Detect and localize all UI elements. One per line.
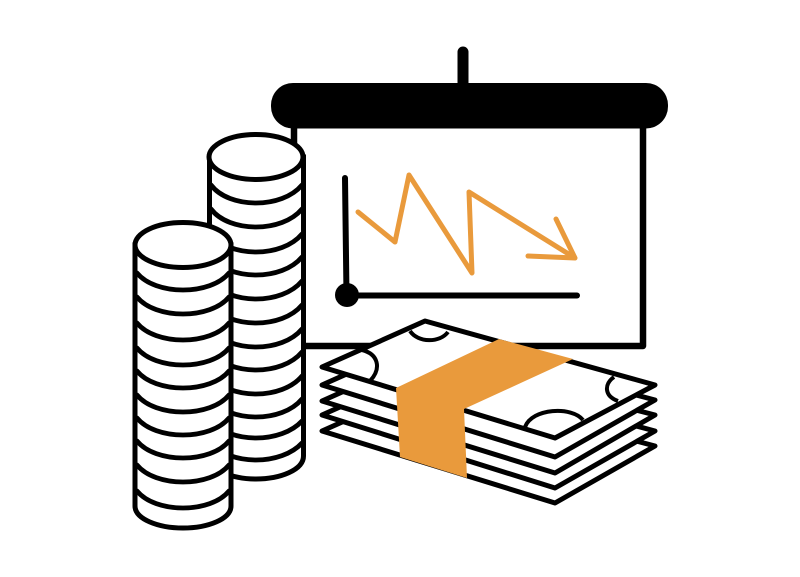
top roller bar [271, 83, 668, 128]
lower bills [322, 339, 655, 503]
banknote stack [322, 321, 655, 503]
projector screen [271, 52, 668, 346]
right coin stack [209, 134, 304, 479]
top bill [322, 321, 655, 438]
left coin stack [135, 222, 231, 528]
chart axes [335, 178, 577, 307]
line chart [335, 175, 577, 307]
bill corner arcs [362, 331, 618, 427]
orange paper band [396, 339, 573, 478]
screen panel [294, 110, 643, 346]
hanging pin [458, 52, 468, 90]
falling orange arrow [358, 175, 575, 273]
